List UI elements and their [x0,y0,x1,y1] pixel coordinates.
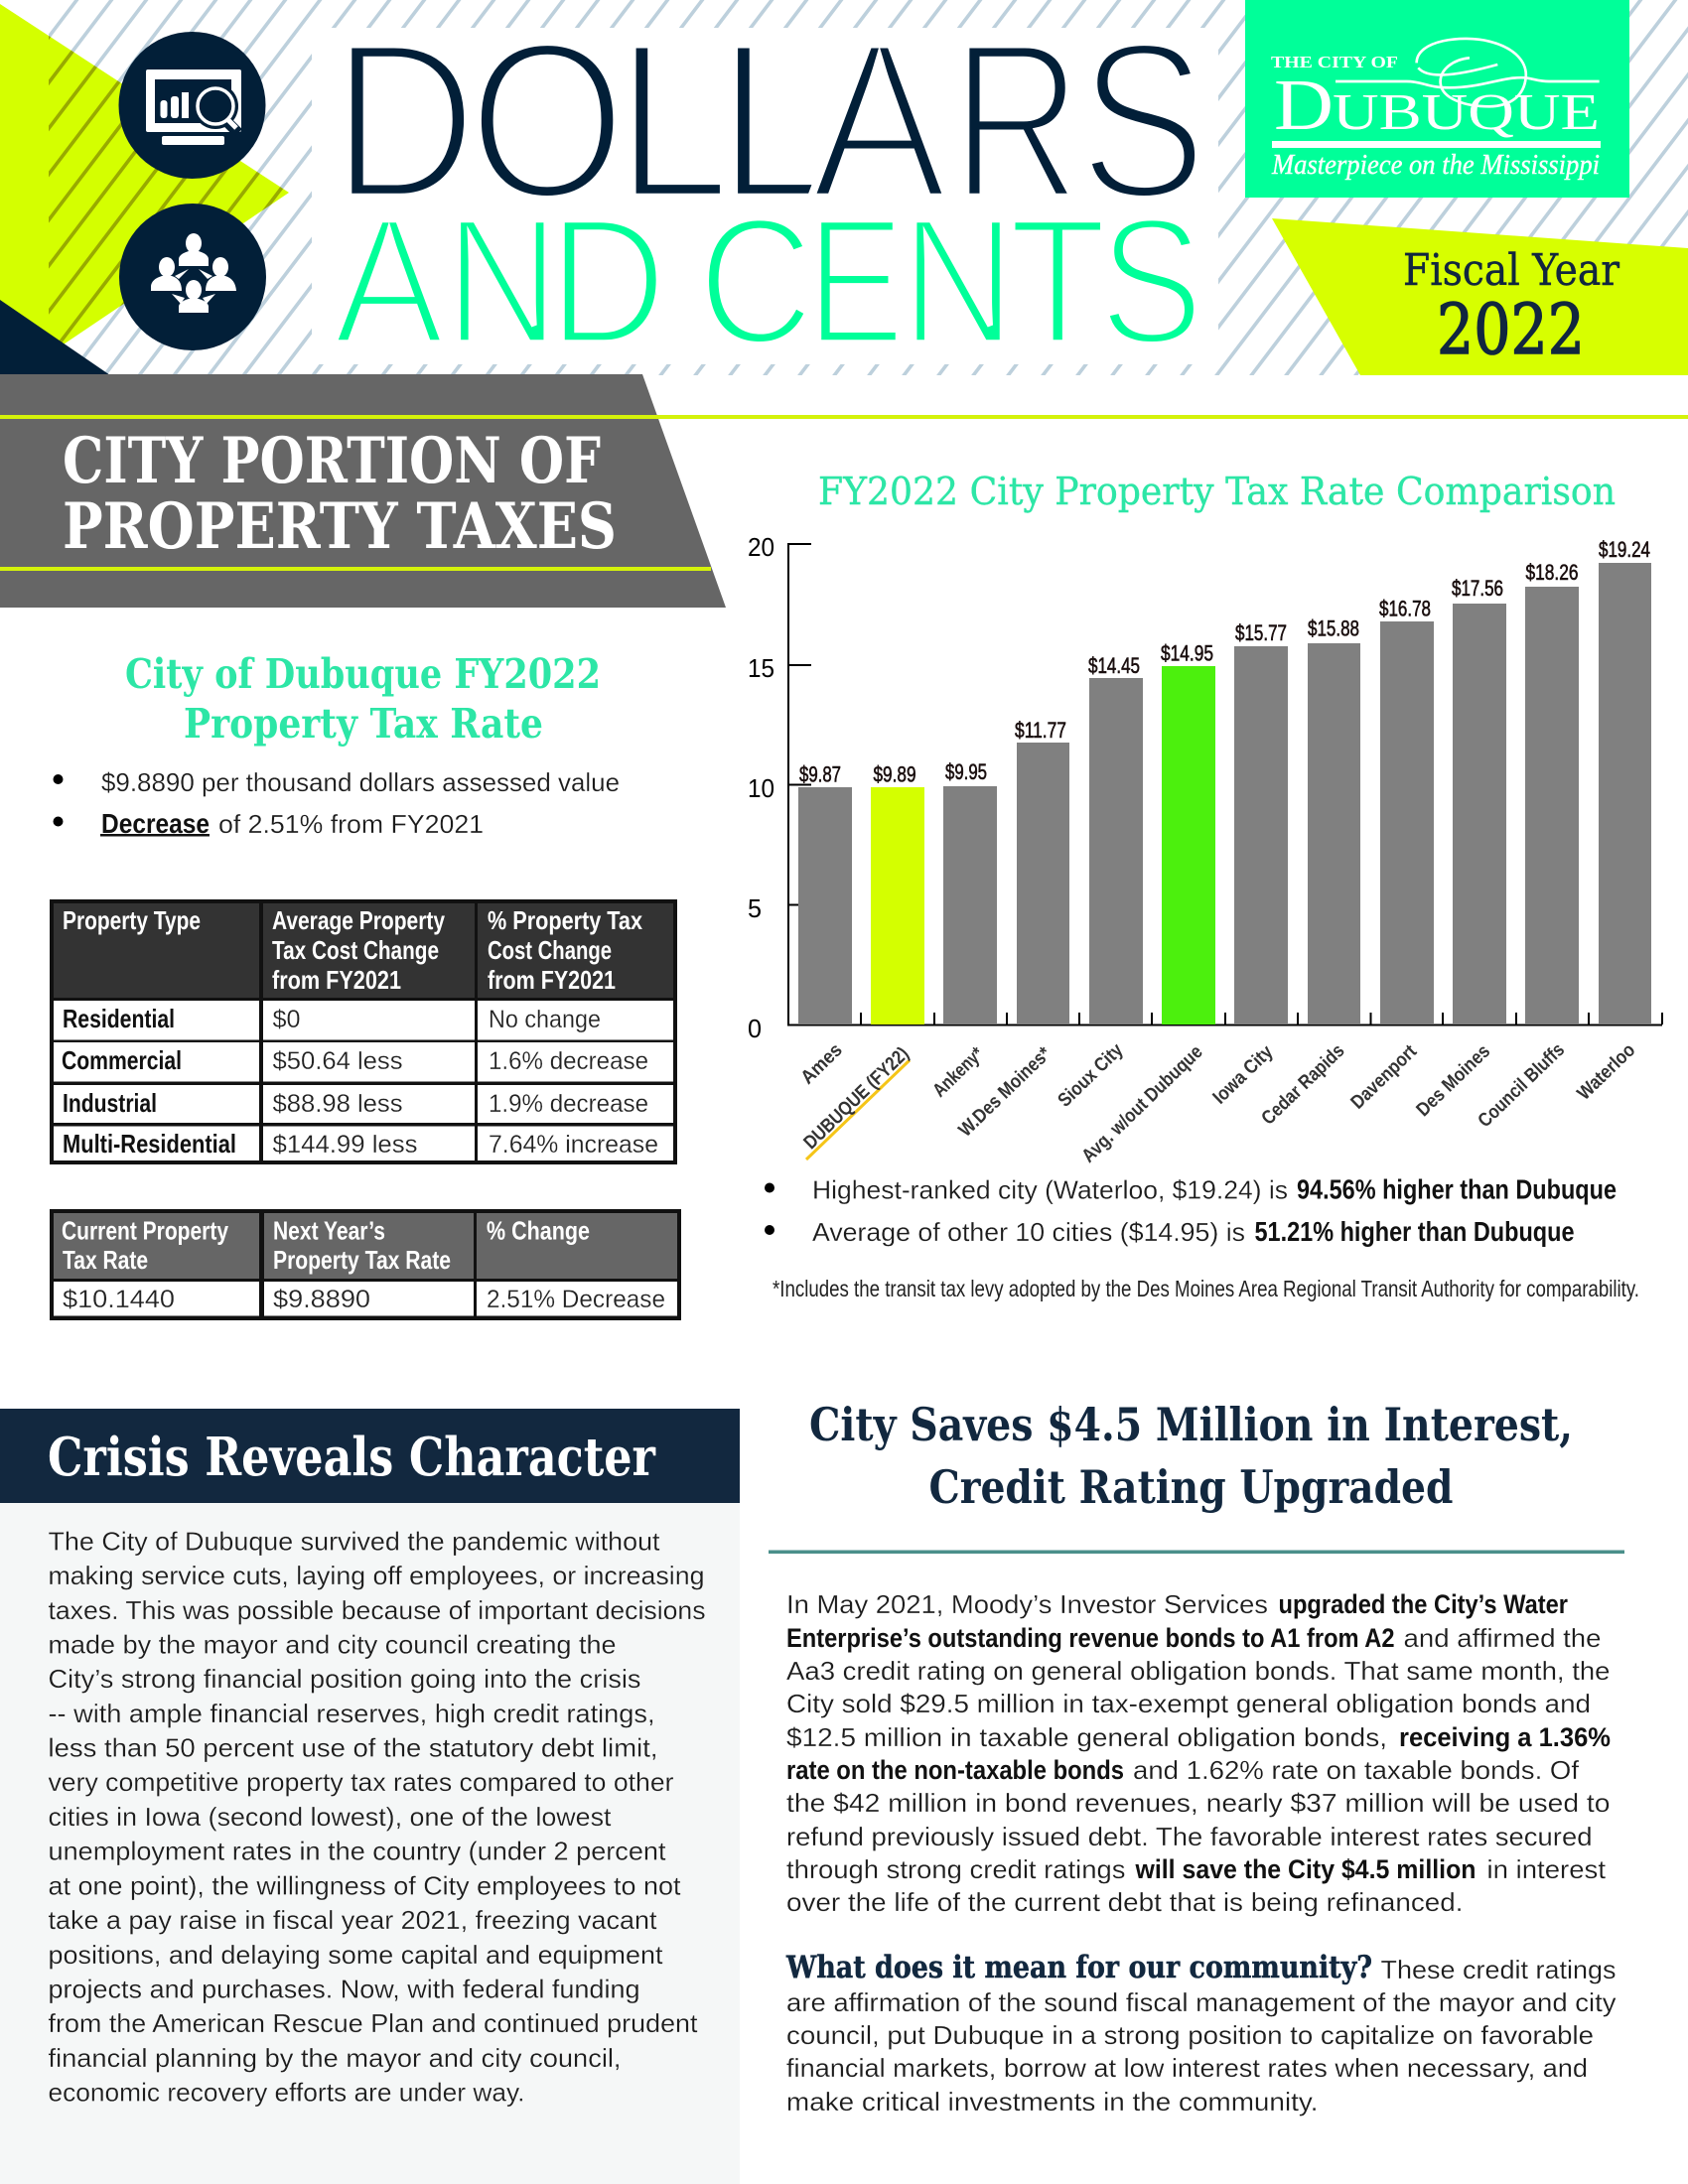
table: property type changes: Property Type [63,905,201,935]
table: property type changes: % Property Tax [488,905,642,935]
title: And Cents: N [445,181,559,381]
value labels: $9.95 [945,759,987,784]
table: current vs next year's rate: $9.8890 [273,1286,370,1313]
value labels: $16.78 [1379,596,1431,621]
lime triangle [0,4,289,387]
article: what does it mean: council, put Dubuque in a strong position to capitalize on favorable [786,2020,1594,2050]
title: Dollars: O [468,0,627,245]
panel body text [48,1527,705,2107]
city labels: Sioux City [1054,1039,1128,1112]
article: credit rating: Enterprise’s outstanding revenue bonds to A1 from A2 [786,1623,1394,1653]
article: credit rating: refund previously issued debt. The favorable interest rates secured [786,1822,1593,1851]
header striped background [49,0,1688,375]
article: what does it mean: make critical investments in the community. [786,2087,1319,2116]
title: And Cents: C [698,181,813,381]
value labels: $15.88 [1308,615,1359,641]
panel body text: taxes. This was possible because of important decisions [48,1595,705,1625]
article: what does it mean [785,1950,1617,2116]
table: current vs next year's rate: Tax Rate [63,1245,148,1275]
panel body text: economic recovery efforts are under way. [48,2077,524,2107]
value labels: $17.56 [1452,576,1503,601]
heading: City Saves $4.5 Million: City Saves $4.5 Million in Interest, [809,1398,1573,1451]
city labels: Waterloo [1573,1039,1639,1105]
article: what does it mean: financial markets, borrow at low interest rates when necessary, and [786,2053,1588,2083]
city labels: Avg. w/out Dubuque [1077,1041,1207,1167]
article: credit rating: the $42 million in bond revenues, nearly $37 million will be used to [786,1788,1611,1818]
table: current vs next year's rate: Current Property [62,1215,228,1245]
table: property type changes: $88.98 less [272,1090,403,1118]
title: And Cents: A [334,181,445,381]
table: property type changes: Average Property [272,905,445,935]
panel body text: cities in Iowa (second lowest), one of the lowest [48,1802,612,1832]
title: Dollars: S [1079,0,1207,245]
heading rule [769,1551,1624,1554]
navy corner triangle [0,300,110,375]
logo panel: City of Dubuque: THE CITY OF [1271,53,1398,71]
tax rate bullet list: Decrease [101,808,210,839]
panel body text: take a pay raise in fiscal year 2021, freezing vacant [48,1905,657,1935]
table: property type changes: $0 [272,1006,300,1033]
title: Dollars: R [951,0,1082,245]
panel body text: City’s strong financial position going into the crisis [48,1664,641,1694]
section banner: City Portion of Property Taxes: PROPERTY TAXES [63,489,617,564]
panel heading bar: Crisis Reveals Character [48,1427,656,1488]
fiscal year tag [1272,218,1688,375]
value labels: $18.26 [1525,560,1579,585]
y axis labels: 20 [748,532,774,562]
table: property type changes: 1.9% decrease [489,1090,648,1118]
icon: connected people [119,204,266,350]
panel body text: very competitive property tax rates compared to other [48,1767,674,1797]
city labels: Davenport [1346,1040,1421,1114]
city labels: Ames [796,1039,847,1089]
value labels: $19.24 [1599,537,1650,562]
value labels: $15.77 [1235,620,1287,645]
city labels [796,1038,1639,1167]
title: And Cents: N [902,181,1016,381]
panel body text: making service cuts, laying off employees, or increasing [48,1561,705,1590]
panel body text: from the American Rescue Plan and continued prudent [48,2008,698,2038]
chart title: FY2022 City Property Tax Rate Comparison [818,470,1616,513]
bar chart: tax rate comparison [748,532,1662,1167]
tax rate bullet list: of 2.51% from FY2021 [218,809,484,839]
table: current vs next year's rate: 2.51% Decrease [487,1286,665,1313]
tax rate bullet list: $9.8890 per thousand dollars assessed value [101,767,620,797]
chart takeaways [765,1173,1617,1247]
article: credit rating: $12.5 million in taxable general obligation bonds, [786,1722,1387,1752]
panel heading bar [0,1409,740,1503]
panel body text: positions, and delaying some capital and equipment [48,1940,663,1970]
article: what does it mean: These credit ratings [1380,1955,1617,1984]
city labels: Ankeny* [928,1042,988,1102]
table: current vs next year's rate: Next Year’s [273,1215,385,1245]
fiscal year tag: Fiscal Year [1403,245,1620,296]
heading: tax rate [125,650,601,748]
city labels: DUBUQUE (FY22) [799,1042,914,1154]
article: what does it mean: are affirmation of the sound fiscal management of the mayor and city [786,1987,1617,2017]
title: Dollars: L [616,0,731,245]
table: current vs next year's rate [50,1209,681,1320]
table: property type changes: Cost Change [488,935,612,965]
value labels: $14.45 [1088,653,1140,678]
section banner: City Portion of Property Taxes [0,374,1688,608]
panel body text: projects and purchases. Now, with federal funding [48,1974,639,2003]
city labels: Iowa City [1208,1041,1278,1109]
chart takeaways: Highest-ranked city (Waterloo, $19.24) is [812,1175,1288,1205]
title: Dollars: D [332,0,478,245]
city labels: Des Moines [1412,1040,1494,1121]
title: And Cents: D [548,181,667,381]
article: credit rating: upgraded the City’s Water [1279,1589,1568,1619]
city labels: Council Bluffs [1474,1038,1569,1132]
y axis labels: 10 [748,773,774,803]
title: And Cents: E [806,181,905,381]
table: current vs next year's rate: $10.1440 [63,1286,175,1313]
chart takeaways: Average of other 10 cities ($14.95) is [812,1217,1245,1247]
panel body text: -- with ample financial reserves, high credit ratings, [48,1699,655,1728]
table: property type changes: Multi-Residential [63,1129,236,1159]
table: property type changes: Commercial [62,1045,182,1075]
heading: tax rate: Property Tax Rate [184,700,543,748]
heading: City Saves $4.5 Million: Credit Rating Upgraded [929,1460,1454,1514]
fiscal year tag: 2022 [1437,289,1585,370]
panel body text: financial planning by the mayor and city council, [48,2043,622,2073]
logo panel: City of Dubuque: UBUQUE [1333,84,1600,141]
panel body text: less than 50 percent use of the statutory debt limit, [48,1733,657,1763]
heading: tax rate: City of Dubuque FY2022 [125,650,601,698]
city labels: W.Des Moines* [954,1042,1055,1142]
panel: Crisis Reveals Character [0,1409,740,2184]
article: credit rating: through strong credit ratings [786,1854,1126,1884]
table: property type changes: No change [489,1006,601,1033]
table: property type changes [50,899,677,1164]
article: credit rating: and affirmed the [1404,1623,1601,1653]
table: property type changes: from FY2021 [272,965,401,995]
article: credit rating: will save the City $4.5 million [1135,1854,1476,1884]
article: credit rating: over the life of the current debt that is being refinanced. [786,1887,1464,1917]
title: And Cents: T [1009,181,1107,381]
table: current vs next year's rate: Property Tax Rate [273,1245,451,1275]
title: Dollars [332,0,1207,245]
table: property type changes: Residential [63,1004,175,1033]
table: property type changes: Industrial [63,1088,157,1118]
title: And Cents [334,181,1203,381]
table: property type changes: 1.6% decrease [489,1047,648,1075]
y axis labels: 5 [748,893,762,923]
chart takeaways: 51.21% higher than Dubuque [1255,1216,1575,1247]
tax rate bullet list [54,767,620,839]
y axis labels: 0 [748,1014,762,1043]
table: property type changes: Tax Cost Change [272,935,439,965]
value labels: $9.89 [874,762,915,786]
icon: monitor with chart and magnifier [119,32,266,179]
section banner: City Portion of Property Taxes: CITY PORTION OF [63,424,601,498]
panel body text: at one point), the willingness of City employees to not [48,1870,681,1900]
value labels: $11.77 [1015,718,1066,743]
bars [798,563,1651,1024]
title: Dollars: L [717,0,832,245]
logo panel: City of Dubuque: D [1274,65,1334,145]
panel body text: unemployment rates in the country (under 2 percent [48,1837,666,1866]
city labels: Cedar Rapids [1257,1039,1349,1130]
article: credit rating: in interest [1487,1854,1607,1884]
article: credit rating: Aa3 credit rating on general obligation bonds. That same month, the [786,1656,1611,1686]
article: credit rating: City sold $29.5 million in tax-exempt general obligation bonds and [786,1689,1591,1718]
article: credit rating: In May 2021, Moody’s Investor Services [786,1589,1268,1619]
title: Dollars: A [810,0,947,245]
value labels: $9.87 [799,762,841,786]
value labels: $14.95 [1161,641,1213,665]
panel body text: The City of Dubuque survived the pandemic without [48,1527,660,1557]
logo panel: City of Dubuque [1245,0,1629,198]
table: property type changes: from FY2021 [488,965,616,995]
table: property type changes: $144.99 less [272,1131,417,1159]
article: what does it mean: What does it mean for our community? [785,1950,1372,1985]
table: property type changes: 7.64% increase [489,1131,658,1159]
article: credit rating: and 1.62% rate on taxable bonds. Of [1133,1755,1580,1785]
value labels [799,537,1650,786]
table: property type changes: $50.64 less [272,1047,403,1075]
panel body text: made by the mayor and city council creating the [48,1630,616,1660]
article: credit rating: receiving a 1.36% [1399,1722,1611,1752]
logo panel: City of Dubuque: Masterpiece on the Mississippi [1271,150,1600,181]
article: credit rating [786,1589,1611,1917]
article: credit rating: rate on the non-taxable bonds [786,1755,1124,1785]
table: current vs next year's rate: % Change [487,1215,590,1245]
heading: City Saves $4.5 Million [809,1398,1573,1514]
y axis labels [748,532,774,1043]
chart takeaways: 94.56% higher than Dubuque [1297,1173,1617,1205]
title: And Cents: S [1099,181,1203,381]
y axis labels: 15 [748,653,774,683]
